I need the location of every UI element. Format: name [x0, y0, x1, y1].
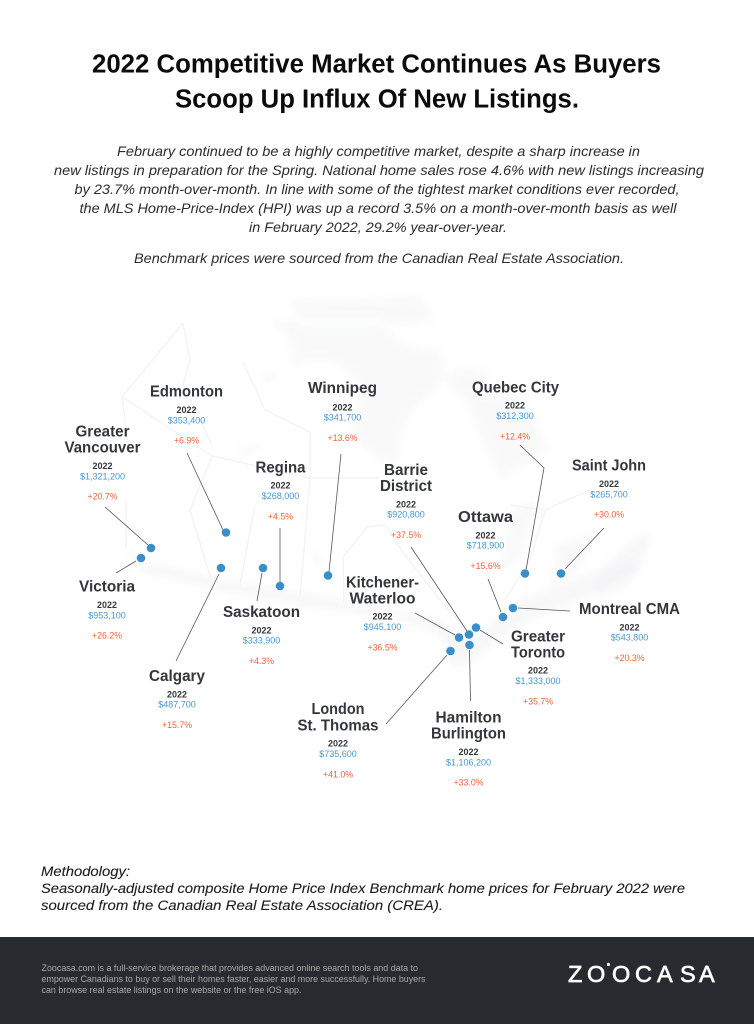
city: Kitchener-Waterloo [346, 574, 419, 652]
city: Greater Toronto [511, 629, 565, 706]
intro paragraph [54, 144, 704, 235]
footer text: Zoocasa.com is a full-service brokerage that provides advanced online search tools and data to [42, 963, 418, 973]
title: Scoop Up Influx Of New Listings. [175, 85, 579, 113]
city: Greater Toronto: 2022 [528, 666, 548, 676]
city: Winnipeg: 2022 [332, 402, 353, 412]
city: Saskatoon: 2022 [251, 625, 272, 635]
city: Greater Vancouver: Greater [76, 424, 130, 441]
city: Greater Toronto: +35.7% [523, 696, 553, 706]
city: Greater Vancouver: 2022 [92, 461, 113, 471]
city: Quebec City: 2022 [505, 401, 525, 411]
city: Calgary: $487,700 [158, 700, 196, 710]
city: Edmonton: $353,400 [168, 415, 205, 425]
city: Victoria: Victoria [79, 579, 135, 596]
city: Montreal CMA: $543,800 [611, 633, 648, 643]
city: Winnipeg: $341,700 [324, 413, 361, 423]
city: Saskatoon: Saskatoon [223, 604, 300, 621]
city: Barrie District: 2022 [396, 499, 416, 509]
city: London St. Thomas: $735,600 [319, 749, 357, 759]
city: Hamilton Burlington: Burlington [431, 726, 506, 743]
city: Victoria: $953,100 [88, 610, 126, 620]
footer text [42, 963, 426, 995]
city: Victoria: 2022 [97, 600, 117, 610]
city: London St. Thomas: +41.0% [323, 769, 353, 779]
title [92, 51, 661, 113]
city: Winnipeg: +13.6% [327, 433, 358, 443]
city: Hamilton Burlington: +33.0% [453, 778, 484, 788]
methodology note: sourced from the Canadian Real Estate Association (CREA). [41, 898, 443, 913]
intro paragraph: the MLS Home-Price-Index (HPI) was up a record 3.5% on a month-over-month basis as well [80, 201, 678, 216]
location dots [137, 528, 565, 655]
city: Regina [256, 459, 306, 521]
city: Regina: Regina [256, 459, 306, 476]
city: Kitchener-Waterloo: $945,100 [364, 622, 401, 632]
city: Hamilton Burlington: $1,106,200 [446, 757, 491, 767]
city: London St. Thomas: 2022 [328, 739, 348, 749]
city: Greater Toronto: $1,333,000 [515, 676, 561, 686]
city: Regina: +4.5% [268, 511, 293, 521]
city: Edmonton: Edmonton [150, 384, 223, 401]
map of Canada [122, 296, 652, 668]
city: Quebec City: +12.4% [500, 431, 530, 441]
city: Saskatoon: $333,900 [243, 636, 280, 646]
city: London St. Thomas: London [312, 701, 364, 718]
city: Greater Toronto: Toronto [511, 644, 565, 661]
city: Edmonton: +6.9% [174, 436, 199, 446]
city: Montreal CMA: Montreal CMA [579, 601, 680, 618]
city: Greater Vancouver: +20.7% [87, 492, 118, 502]
methodology note [41, 864, 685, 913]
city: Kitchener-Waterloo: Waterloo [350, 590, 416, 607]
intro paragraph: February continued to be a highly competitive market, despite a sharp increase in [117, 144, 640, 159]
city: Ottawa: +15.6% [470, 561, 501, 571]
city: Calgary [149, 668, 205, 730]
city: Hamilton Burlington [431, 709, 506, 788]
methodology note: Methodology: [41, 864, 130, 879]
city: Quebec City: $312,300 [496, 411, 534, 421]
city: Saint John: $265,700 [590, 489, 628, 499]
city: Saint John: 2022 [599, 479, 619, 489]
city: Winnipeg [308, 380, 377, 443]
intro paragraph: new listings in preparation for the Spring. National home sales rose 4.6% with new listings increasing [54, 163, 704, 178]
city: Saskatoon: +4.3% [249, 656, 274, 666]
city: Greater Vancouver [64, 424, 140, 502]
city: Montreal CMA: 2022 [619, 622, 640, 632]
city: Quebec City [472, 379, 559, 441]
city: Winnipeg: Winnipeg [308, 380, 377, 397]
city: Barrie District: District [380, 478, 432, 495]
city: Hamilton Burlington: 2022 [458, 747, 479, 757]
city: Barrie District: +37.5% [391, 530, 421, 540]
logo: Zoocasa: ZOOCASA [568, 961, 715, 987]
city: Kitchener-Waterloo: 2022 [372, 612, 393, 622]
intro paragraph: by 23.7% month-over-month. In line with some of the tightest market conditions ever recorded, [74, 182, 680, 197]
city: Regina: 2022 [270, 481, 291, 491]
leader lines [105, 445, 604, 724]
city: Kitchener-Waterloo: +36.5% [367, 642, 398, 652]
city: Saint John: Saint John [572, 458, 646, 475]
city: Hamilton Burlington: Hamilton [436, 709, 502, 726]
city: Ottawa: $718,900 [467, 541, 504, 551]
methodology note: Seasonally-adjusted composite Home Price Index Benchmark home prices for February 2022 were [41, 881, 685, 896]
city: Barrie District: $920,800 [387, 510, 425, 520]
city: Saint John: +30.0% [594, 510, 624, 520]
city: London St. Thomas [298, 701, 378, 779]
city: Quebec City: Quebec City [472, 379, 559, 396]
city: Victoria: +26.2% [92, 631, 122, 641]
city: Greater Vancouver: Vancouver [64, 440, 140, 457]
footer band [0, 937, 754, 1024]
city: Barrie District [380, 462, 432, 540]
city: Ottawa: Ottawa [458, 509, 513, 526]
city: Greater Toronto: Greater [511, 629, 565, 646]
city: Edmonton: 2022 [176, 405, 197, 415]
city: Barrie District: Barrie [384, 462, 428, 479]
title: 2022 Competitive Market Continues As Buyers [92, 51, 661, 79]
city: Saint John [572, 458, 646, 520]
city: Calgary: Calgary [149, 668, 205, 685]
source note: Benchmark prices were sourced from the Canadian Real Estate Association. [134, 251, 624, 266]
city: Ottawa [458, 509, 513, 571]
intro paragraph: in February 2022, 29.2% year-over-year. [249, 220, 507, 235]
city: Kitchener-Waterloo: Kitchener- [346, 574, 419, 591]
city: Victoria [79, 579, 135, 641]
city: Montreal CMA [579, 601, 680, 663]
city: London St. Thomas: St. Thomas [298, 717, 378, 734]
city: Saskatoon [223, 604, 300, 666]
city: Calgary: +15.7% [162, 720, 192, 730]
footer text: empower Canadians to buy or sell their homes faster, easier and more successfully. Home buyers [42, 974, 426, 984]
city: Greater Vancouver: $1,321,200 [80, 471, 125, 481]
city: Edmonton [150, 384, 223, 446]
city: Montreal CMA: +20.3% [614, 653, 645, 663]
footer text: can browse real estate listings on the website or the free iOS app. [42, 985, 302, 995]
city: Calgary: 2022 [167, 689, 187, 699]
city: Regina: $268,000 [262, 491, 299, 501]
city: Ottawa: 2022 [475, 530, 496, 540]
